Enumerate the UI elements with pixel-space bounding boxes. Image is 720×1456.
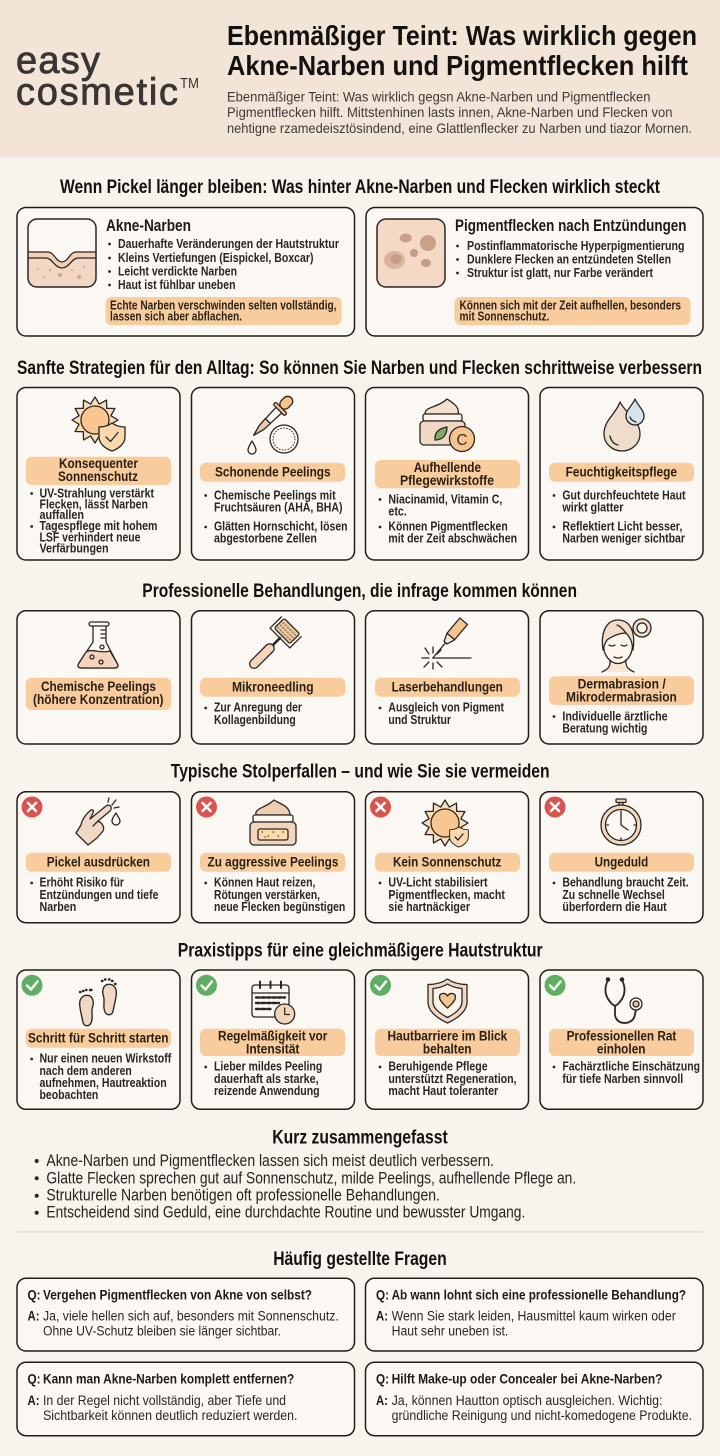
bullet list: überfordern die Haut [562,899,667,914]
summary list: Glatte Flecken sprechen gut auf Sonnenschutz, milde Peelings, aufhellende Pflege an. [46,1169,576,1187]
bullet list: Können Pigmentflecken [388,519,508,534]
answer: Ohne UV-Schutz bleiben sie länger sichtbar. [43,1324,281,1340]
label: Regelmäßigkeit vor [218,1029,328,1045]
bullet list: Kollagenbildung [214,712,296,727]
answer [376,1393,692,1424]
panel: Schonende Peelings [192,388,354,560]
logo: easy cosmetic: TM [180,75,199,92]
bullet list: neue Flecken begünstigen [214,899,345,914]
bullet list: Ausgleich von Pigment [388,700,505,715]
bullet list: Dauerhafte Veränderungen der Hautstruktur [118,236,339,251]
icon: laser [422,618,471,669]
answer: Ja, können Hautton optisch ausgleichen. Wichtig: [392,1393,662,1409]
answer: A: [28,1393,40,1409]
heading: Praxistipps: Praxistipps für eine gleichmäßigere Hautstruktur [178,940,543,962]
bullet list: Können Haut reizen, [214,875,315,890]
FAQ card 3 [17,1362,354,1436]
summary list: Entscheidend sind Geduld, eine durchdachte Routine und bewusster Umgang. [46,1204,525,1222]
label: Zu aggressive Peelings [208,855,338,871]
label [200,1029,345,1057]
question: Q: [28,1287,40,1303]
bullet list [553,1059,700,1086]
bullet list: unterstützt Regeneration, [388,1071,516,1086]
label [200,678,345,697]
bullet list: auffallen [40,507,84,522]
bullet list: Leicht verdickte Narben [118,264,237,278]
icon: green check badge [196,975,217,996]
bullet list: beobachten [40,1087,98,1102]
bullet list [553,708,668,736]
label: Chemische Peelings [41,679,156,695]
panel: Kein Sonnenschutz [366,792,528,923]
bullet list: UV-Strahlung verstärkt [40,485,155,500]
label: Schritt für Schritt starten [28,1031,168,1047]
label [375,1029,520,1057]
label: Aufhellende [414,460,481,476]
icon: cream jar with vitamin C [420,399,474,452]
icon: stopwatch [601,799,641,845]
panel: Laserbehandlungen [366,611,528,744]
label: Hautbarriere im Blick [388,1029,507,1045]
bullet list [553,875,689,914]
icon: skin cross-section [28,219,96,287]
header banner [0,0,720,158]
panel: Schritt für Schritt [17,970,180,1109]
bullet list: sie hartnäckiger [388,899,470,914]
bullet list: Lieber mildes Peeling [214,1059,322,1074]
icon: green check badge [22,975,42,996]
intro text [227,88,692,136]
bullet list: aufnehmen, Hautreaktion [40,1075,167,1090]
label: Pflegewirkstoffe [400,473,494,489]
label: Schonende Peelings [215,465,331,481]
label [549,676,694,706]
bullet list: Verfärbungen [40,540,109,555]
bullet list: Pigmentflecken, macht [388,887,506,902]
bullet list: macht Haut toleranter [388,1083,498,1098]
summary list [35,1152,576,1222]
icon: red cross badge [196,796,217,818]
bullet list: Rötungen verstärken, [214,887,320,902]
label: Professionellen Rat [567,1029,677,1045]
title [227,20,697,81]
bullet list: Haut ist fühlbar uneben [118,277,236,292]
label [26,678,171,710]
icon: face [602,619,651,672]
icon: squeezing hand [76,798,120,845]
icon: red cross badge [544,796,566,818]
answer: Haut sehr uneben ist. [392,1324,508,1340]
icon: shield with heart [428,979,467,1023]
bullet list [108,236,339,292]
answer [376,1309,676,1340]
bullet list [553,487,686,546]
panel: Feuchtigkeitspflege [540,388,703,560]
icon: sun and small shield [422,800,468,847]
question: Hilft Make-up oder Concealer bei Akne-Narben? [392,1371,662,1387]
bullet list: LSF verhindert neue [40,529,140,544]
answer: Sichtbarkeit können deutlich reduziert werden. [43,1408,298,1424]
bullet list [30,875,158,914]
bullet list: Entzündungen und tiefe [40,887,158,902]
label: Ungeduld [595,855,648,871]
answer: In der Regel nicht vollständig, aber Tiefe und [43,1393,286,1409]
bullet list [204,1059,322,1098]
bullet list: Fruchtsäuren (AHA, BHA) [214,500,342,515]
bullet list: Flecken, lässt Narben [40,496,148,511]
answer [28,1309,339,1340]
callout: Echte Narben verschwinden selten vollständig, [110,298,336,312]
bullet list: abgestorbene Zellen [214,531,317,546]
panel: Professionellen Rat [540,970,703,1109]
intro text: nehtigne rzamedeisztösindend, eine Glattlenflecker zu Narben und tiazor Mornen. [227,120,692,136]
callout [454,297,690,325]
bullet list: nach dem anderen [40,1063,132,1078]
bullet list: Narben [40,899,76,914]
icon: flask [78,622,118,668]
intro text: Pigmentflecken hilft. Mittstenhinen lasts innen, Akne-Narben und Flecken von [227,104,672,120]
heading: Professionelle Behandlungen: Professionelle Behandlungen, die infrage kommen können [142,580,577,602]
label: behalten [423,1041,472,1057]
FAQ card 4 [366,1362,703,1436]
bullet list [379,491,517,546]
bullet list [456,238,684,280]
question: Q: [376,1287,389,1303]
panel: Hautbarriere [366,970,528,1109]
summary list: Strukturelle Narben benötigen oft professionelle Behandlungen. [46,1187,440,1205]
bullet list [30,485,157,555]
question: Q: [28,1371,40,1387]
panel: Dermabrasion [540,611,703,744]
panel: Zu aggressive Peelings [192,792,354,923]
panel: Akne-Narben [17,208,354,336]
heading: Kurz zusammengefasst: Kurz zusammengefasst [272,1126,448,1148]
panel: Mikroneedling [192,611,354,744]
answer: A: [28,1309,40,1325]
heading: Häufig gestellte Fragen: Häufig gestellte Fragen [273,1248,447,1270]
label [549,1029,694,1057]
label: einholen [597,1041,646,1057]
bullet list: Beruhigende Pflege [388,1059,488,1074]
panel: Konsequenter Sonnenschutz [17,388,180,560]
logo: easy cosmetic: cosmetic [16,72,178,114]
label: Pickel ausdrücken [47,855,150,871]
bullet list [204,487,348,546]
question: Q: [376,1371,389,1387]
bullet list: Struktur ist glatt, nur Farbe verändert [467,265,654,280]
icon: sun and shield [72,397,125,451]
logo: easy cosmetic [16,40,199,114]
bullet list: Zur Anregung der [214,700,302,715]
label: (höhere Konzentration) [33,692,164,708]
bullet list: Glätten Hornschicht, lösen [214,519,348,534]
question: Kann man Akne-Narben komplett entfernen? [43,1371,294,1387]
bullet list: Reflektiert Licht besser, [562,519,682,534]
bullet list: Erhöht Risiko für [40,875,124,890]
panel: Ungeduld [540,792,703,923]
callout: lassen sich aber abflachen. [110,308,242,324]
answer: A: [376,1309,388,1325]
title: Akne-Narben und Pigmentflecken hilft [227,50,688,81]
bullet list: Individuelle ärztliche [562,708,668,723]
panel: Pickel ausdrücken [17,792,180,923]
panel: Chemische Peelings [17,611,180,744]
bullet list: reizende Anwendung [214,1083,320,1098]
question: Vergehen Pigmentflecken von Akne von selbst? [43,1287,312,1303]
bullet list [379,700,505,727]
bullet list [379,1059,516,1098]
callout [106,297,342,325]
bullet list: mit der Zeit abschwächen [388,531,517,546]
label [26,456,171,485]
bullet list: Zu schnelle Wechsel [562,887,665,902]
bullet list: Kleins Vertiefungen (Eispickel, Boxcar) [118,250,314,265]
icon: calendar and clock [252,982,295,1024]
answer: Wenn Sie stark leiden, Hausmittel kaum wirken oder [392,1309,676,1325]
bullet list [379,875,506,914]
panel: Regelmäßigkeit [192,970,354,1109]
answer: Ja, viele hellen sich auf, besonders mit Sonnenschutz. [43,1309,339,1325]
bullet list: Behandlung braucht Zeit. [562,875,689,890]
label: Kein Sonnenschutz [393,855,501,871]
icon letter: C: C [456,432,468,449]
icon: scrub jar [250,800,296,845]
callout: mit Sonnenschutz. [460,308,550,324]
icon: water drops [604,399,644,451]
icon: footprints [80,980,116,1026]
bullet list: dauerhaft als starke, [214,1071,319,1086]
logo: easy cosmetic: easy [16,40,100,82]
label: Laserbehandlungen [392,680,503,696]
answer [28,1393,298,1424]
bullet list [30,1051,172,1102]
bullet list: und Struktur [388,712,451,727]
heading: Typische Stolperfallen: Typische Stolperfallen – und wie Sie sie vermeiden [171,760,550,782]
label: Feuchtigkeitspflege [566,465,677,481]
bullet list [204,700,302,727]
bullet list: UV-Licht stabilisiert [388,875,488,890]
icon: red cross badge [370,796,391,818]
label [375,460,520,489]
panel: Aufhellende Pflegewirkstoffe [366,388,528,560]
label: Intensität [246,1041,300,1057]
bullet list: Narben weniger sichtbar [562,531,685,546]
icon: green check badge [544,975,566,996]
FAQ card 2 [366,1278,703,1351]
FAQ card 1 [17,1278,354,1351]
summary list: Akne-Narben und Pigmentflecken lassen sich meist deutlich verbessern. [46,1152,494,1170]
label [549,853,694,872]
answer: A: [376,1393,388,1409]
label: Sonnenschutz [58,469,138,485]
bullet list: wirkt glatter [562,500,624,515]
icon: dropper and pad [248,392,298,454]
bullet list: Beratung wichtig [562,721,647,736]
icon: stethoscope [605,978,642,1023]
icon: red cross badge [22,796,42,818]
bullet list: für tiefe Narben sinnvoll [562,1071,683,1086]
bullet list: Tagespflege mit hohem [40,518,158,533]
bullet list: Dunklere Flecken an entzündeten Stellen [467,252,671,266]
bullet list: Niacinamid, Vitamin C, [388,491,502,506]
label: Dermabrasion / [578,676,666,692]
icon: pigment spots [377,219,445,287]
card heading: Akne-Narben [106,217,191,235]
intro text: Ebenmäßiger Teint: Was wirklich gegsn Akne-Narben und Pigmentflecken [227,88,650,104]
bullet list: etc. [388,504,407,519]
label: Konsequenter [59,456,138,472]
bullet list: Chemische Peelings mit [214,487,336,502]
icon: green check badge [370,975,391,996]
label: Mikrodermabrasion [566,690,677,706]
bullet list: Nur einen neuen Wirkstoff [40,1051,172,1066]
label: Mikroneedling [232,680,314,696]
bullet list [204,875,345,914]
bullet list: Gut durchfeuchtete Haut [562,487,686,502]
panel: Pigmentflecken [366,208,703,336]
icon: derma roller [241,616,302,677]
